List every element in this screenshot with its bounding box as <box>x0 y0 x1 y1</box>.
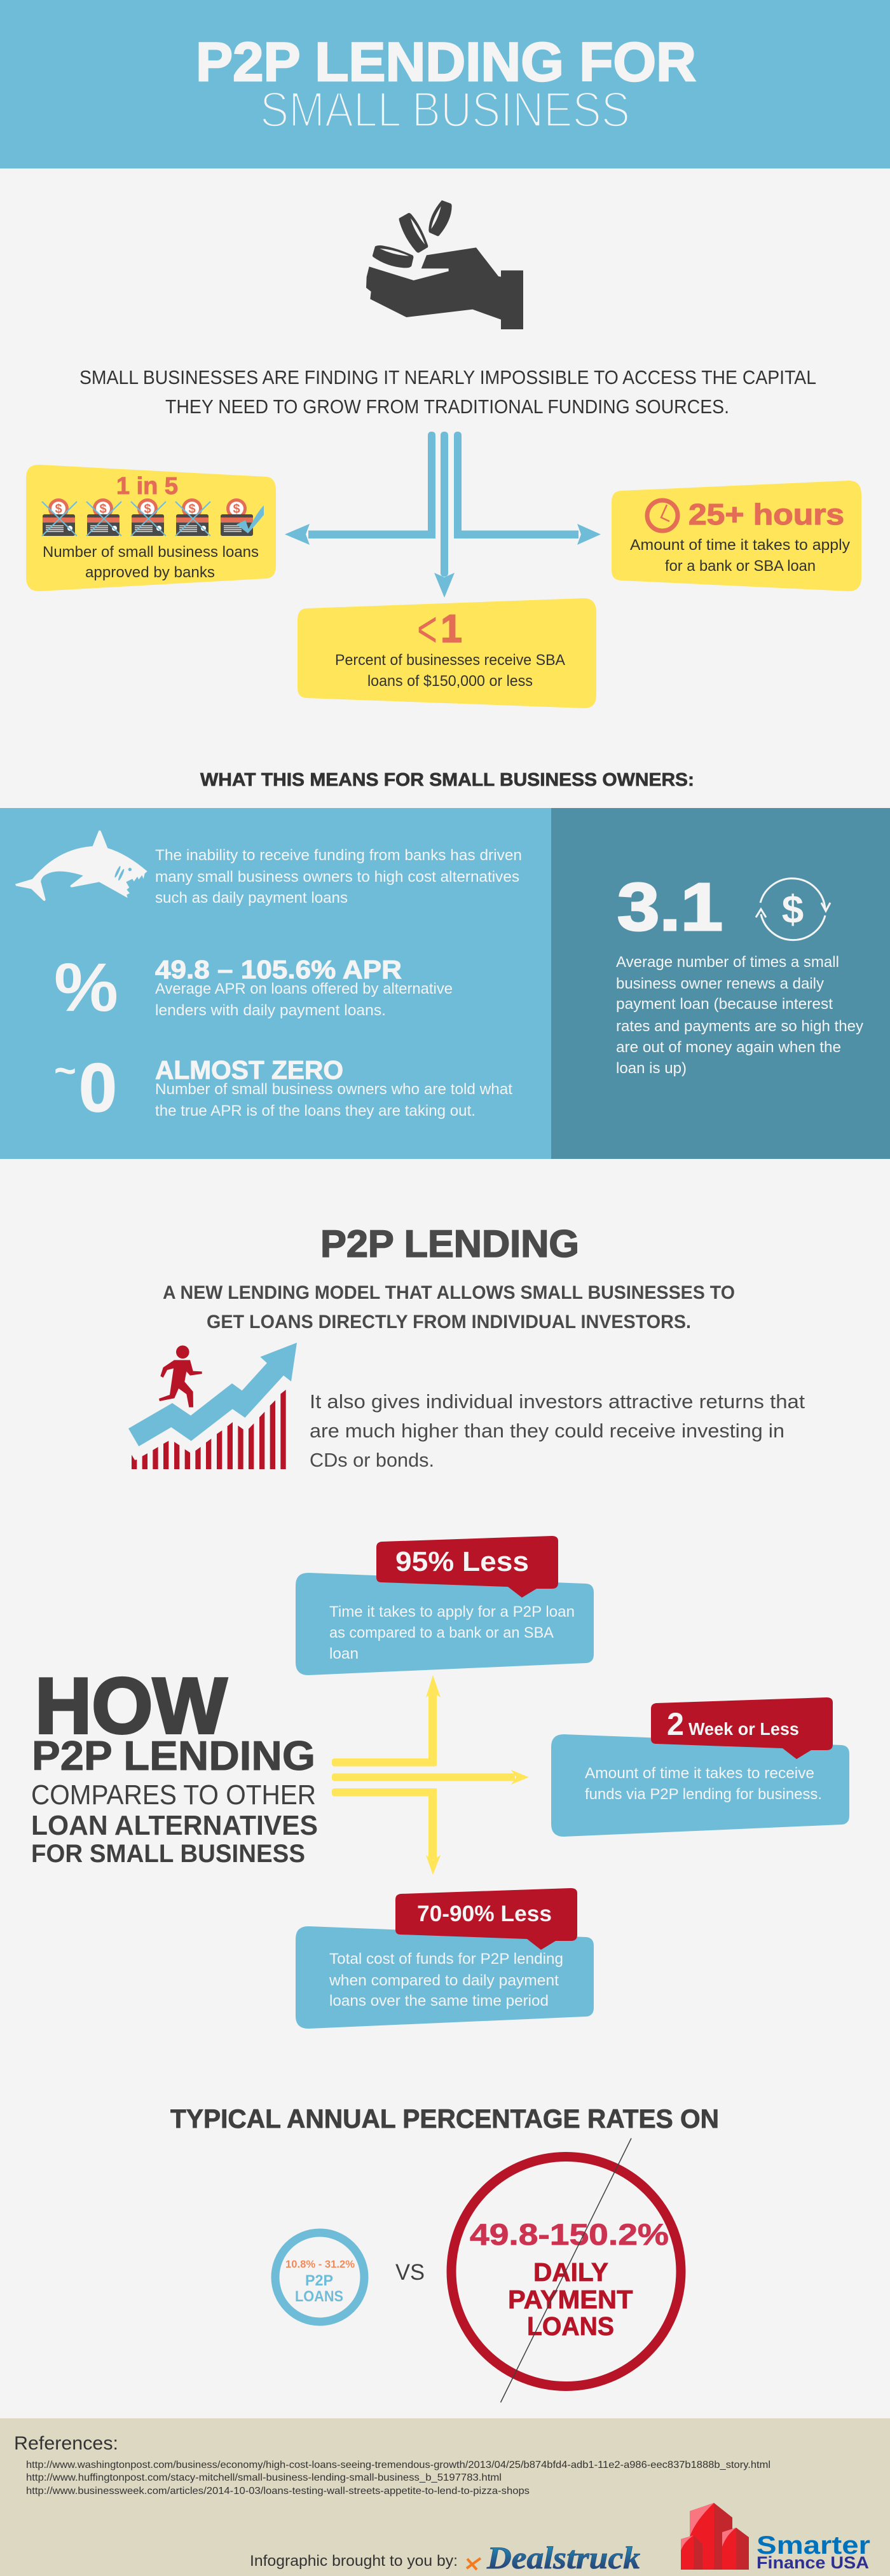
arrows: three-way split <box>285 432 601 598</box>
stat: almost zero: Number of small business owners who are told what <box>155 1081 512 1098</box>
heading: how P2P lending compares <box>31 1662 318 1868</box>
description: as compared to a bank or an SBA <box>329 1624 554 1641</box>
stat: almost zero <box>155 1055 512 1120</box>
stat: APR range: 49.8 – 105.6% APR <box>155 955 402 984</box>
heading: how P2P lending compares: FOR SMALL BUSINESS <box>31 1840 305 1868</box>
description: Amount of time it takes to apply <box>630 537 850 554</box>
chart: daily payment loans circle: LOANS <box>527 2312 614 2341</box>
stat: APR range <box>155 955 453 1019</box>
icon: shark <box>15 830 147 901</box>
reference links: http://www.businessweek.com/articles/2014-10-03/loans-testing-wall-streets-appetite-to-lend-to-pizza-shops <box>26 2486 530 2497</box>
intro statement: SMALL BUSINESSES ARE FINDING IT NEARLY IMPOSSIBLE TO ACCESS THE CAPITAL <box>79 366 816 388</box>
chart: P2P loans circle: LOANS <box>295 2288 343 2305</box>
reference links: http://www.washingtonpost.com/business/economy/high-cost-loans-seeing-tremendous-growth/2013/04/25/b874bfd4-adb1-11e2-a986-eec837b1888b_story.html <box>26 2460 770 2470</box>
description <box>329 1603 575 1662</box>
description: when compared to daily payment <box>329 1972 559 1989</box>
panel: 95% less <box>296 1536 594 1675</box>
text: inability to receive funding: such as daily payment loans <box>155 889 348 907</box>
references heading: References: <box>14 2433 118 2454</box>
panel: 70-90% less <box>296 1888 594 2029</box>
description: Average number of times a small <box>616 954 839 971</box>
heading: how P2P lending compares: COMPARES TO OTHER <box>31 1779 316 1811</box>
stat: less than 1: 1 <box>441 607 462 651</box>
description: Amount of time it takes to receive <box>585 1765 814 1782</box>
description: Total cost of funds for P2P lending <box>329 1950 563 1968</box>
description <box>616 954 863 1077</box>
text: inability to receive funding: The inability to receive funding from banks has driven <box>155 847 522 864</box>
panel: less than 1 percent <box>298 598 596 708</box>
icon: rejected loan card 3: $ <box>144 502 151 516</box>
heading: typical annual percentage rates: TYPICAL ANNUAL PERCENTAGE RATES ON <box>170 2104 719 2134</box>
icon: approved loan card: $ <box>233 502 240 516</box>
icon: rejected loan card 3 <box>131 498 166 536</box>
icon: clock <box>647 500 678 531</box>
reference links <box>26 2460 770 2497</box>
header banner <box>0 0 890 168</box>
logo: Smarter Finance USA: Finance USA <box>756 2553 869 2572</box>
icon: hand tossing coins <box>366 200 523 329</box>
heading: what this means: WHAT THIS MEANS FOR SMALL BUSINESS OWNERS: <box>200 770 694 790</box>
chart: P2P loans circle <box>275 2233 364 2322</box>
icon: approximately zero: 0 <box>79 1049 117 1126</box>
description <box>585 1765 822 1803</box>
icon: rejected loan card 4 <box>175 498 210 536</box>
callout: 95% less <box>376 1536 558 1598</box>
footer panel <box>0 2418 890 2576</box>
stat: almost zero: ALMOST ZERO <box>155 1055 343 1085</box>
stat: APR range: lenders with daily payment loans. <box>155 1002 386 1019</box>
panel: 2 week or less <box>551 1697 849 1837</box>
description: are out of money again when the <box>616 1039 841 1056</box>
intro statement <box>79 366 816 418</box>
stat: less than 1: < <box>417 601 437 657</box>
title: P2P LENDING FOR <box>196 32 696 93</box>
chart: daily payment loans circle <box>451 2139 681 2402</box>
logo: Smarter Finance USA: Smarter <box>756 2531 870 2559</box>
description <box>43 544 259 581</box>
text: lending model definition: A NEW LENDING MODEL THAT ALLOWS SMALL BUSINESSES TO <box>163 1282 735 1303</box>
credit line: Infographic brought to you by: <box>250 2552 458 2570</box>
icon: rejected loan card 2 <box>86 498 121 536</box>
heading: P2P lending: P2P LENDING <box>320 1223 579 1265</box>
description: business owner renews a daily <box>616 975 824 992</box>
stat: 1 in 5: 1 in 5 <box>116 473 178 500</box>
chart: P2P loans circle: P2P <box>305 2272 333 2289</box>
description: Number of small business loans <box>43 544 259 561</box>
panel: 25+ hours <box>612 481 861 591</box>
callout: 70-90% less <box>395 1888 577 1950</box>
stat: 3.1: 3.1 <box>617 870 723 945</box>
reference links: http://www.huffingtonpost.com/stacy-mitchell/small-business-lending-small-business_b_5197783.html <box>26 2472 502 2483</box>
text: investor returns: It also gives individual investors attractive returns that <box>310 1390 805 1413</box>
description: loans over the same time period <box>329 1992 549 2010</box>
callout: 2 week or less: Week or Less <box>688 1719 799 1739</box>
callout: 95% less: 95% Less <box>395 1546 529 1577</box>
text: inability to receive funding: many small business owners to high cost alternatives <box>155 868 519 886</box>
arrows: yellow three-way split <box>332 1675 529 1875</box>
subtitle: SMALL BUSINESS <box>260 81 630 137</box>
text: investor returns <box>310 1390 805 1471</box>
callout: 2 week or less: 2 <box>667 1706 684 1742</box>
description: funds via P2P lending for business. <box>585 1786 822 1803</box>
icon: percent: % <box>54 949 118 1025</box>
callout: 70-90% less: 70-90% Less <box>417 1901 552 1926</box>
description: approved by banks <box>85 564 215 581</box>
label: versus: VS <box>395 2260 425 2285</box>
icon: recurring dollar: $ <box>782 888 804 932</box>
icon: approved loan card <box>221 498 264 536</box>
description: for a bank or SBA loan <box>665 558 816 575</box>
description <box>329 1950 563 2010</box>
heading: how P2P lending compares: HOW <box>35 1662 227 1750</box>
description: loans of $150,000 or less <box>367 673 533 690</box>
chart: daily payment loans circle: PAYMENT <box>508 2285 633 2314</box>
text: lending model definition: GET LOANS DIRECTLY FROM INDIVIDUAL INVESTORS. <box>207 1312 691 1333</box>
panel: 1 in 5 <box>26 465 276 591</box>
intro statement: THEY NEED TO GROW FROM TRADITIONAL FUNDING SOURCES. <box>165 395 729 418</box>
icon: runner on rising arrow chart <box>128 1343 297 1469</box>
text: investor returns: CDs or bonds. <box>310 1449 434 1471</box>
logo: Smarter Finance USA <box>681 2503 870 2572</box>
icon: rejected loan card 1: $ <box>55 502 62 516</box>
stat: APR range: Average APR on loans offered by alternative <box>155 980 453 997</box>
description: loan is up) <box>616 1060 687 1077</box>
icon: rejected loan card 2: $ <box>99 502 107 516</box>
icon: rejected loan card 1 <box>42 498 77 536</box>
chart: P2P loans circle: 10.8% - 31.2% <box>285 2258 355 2270</box>
description: rates and payments are so high they <box>616 1018 863 1035</box>
description <box>335 652 565 690</box>
icon: approximately zero: ~ <box>54 1049 76 1093</box>
stat: almost zero: the true APR is of the loans they are taking out. <box>155 1102 476 1120</box>
heading: how P2P lending compares: LOAN ALTERNATIVES <box>31 1810 318 1841</box>
text: inability to receive funding <box>155 847 522 907</box>
text: investor returns: are much higher than they could receive investing in <box>310 1420 784 1442</box>
stat: 25+ hours: 25+ hours <box>688 498 844 531</box>
description: Percent of businesses receive SBA <box>335 652 565 669</box>
description: loan <box>329 1645 359 1662</box>
description <box>630 537 850 575</box>
description: payment loan (because interest <box>616 996 833 1013</box>
chart: daily payment loans circle: 49.8-150.2% <box>470 2217 669 2251</box>
icon: recurring dollar <box>756 879 830 940</box>
panel: 3.1 renewals <box>551 808 890 1159</box>
heading: how P2P lending compares: P2P LENDING <box>32 1732 315 1779</box>
panel: impact on owners <box>0 808 551 1159</box>
description: Time it takes to apply for a P2P loan <box>329 1603 575 1620</box>
icon: rejected loan card 4: $ <box>188 502 196 516</box>
chart: daily payment loans circle: DAILY <box>533 2257 608 2287</box>
text: lending model definition <box>163 1282 735 1333</box>
callout: 2 week or less <box>651 1697 833 1759</box>
logo: Dealstruck: Dealstruck <box>486 2540 640 2575</box>
